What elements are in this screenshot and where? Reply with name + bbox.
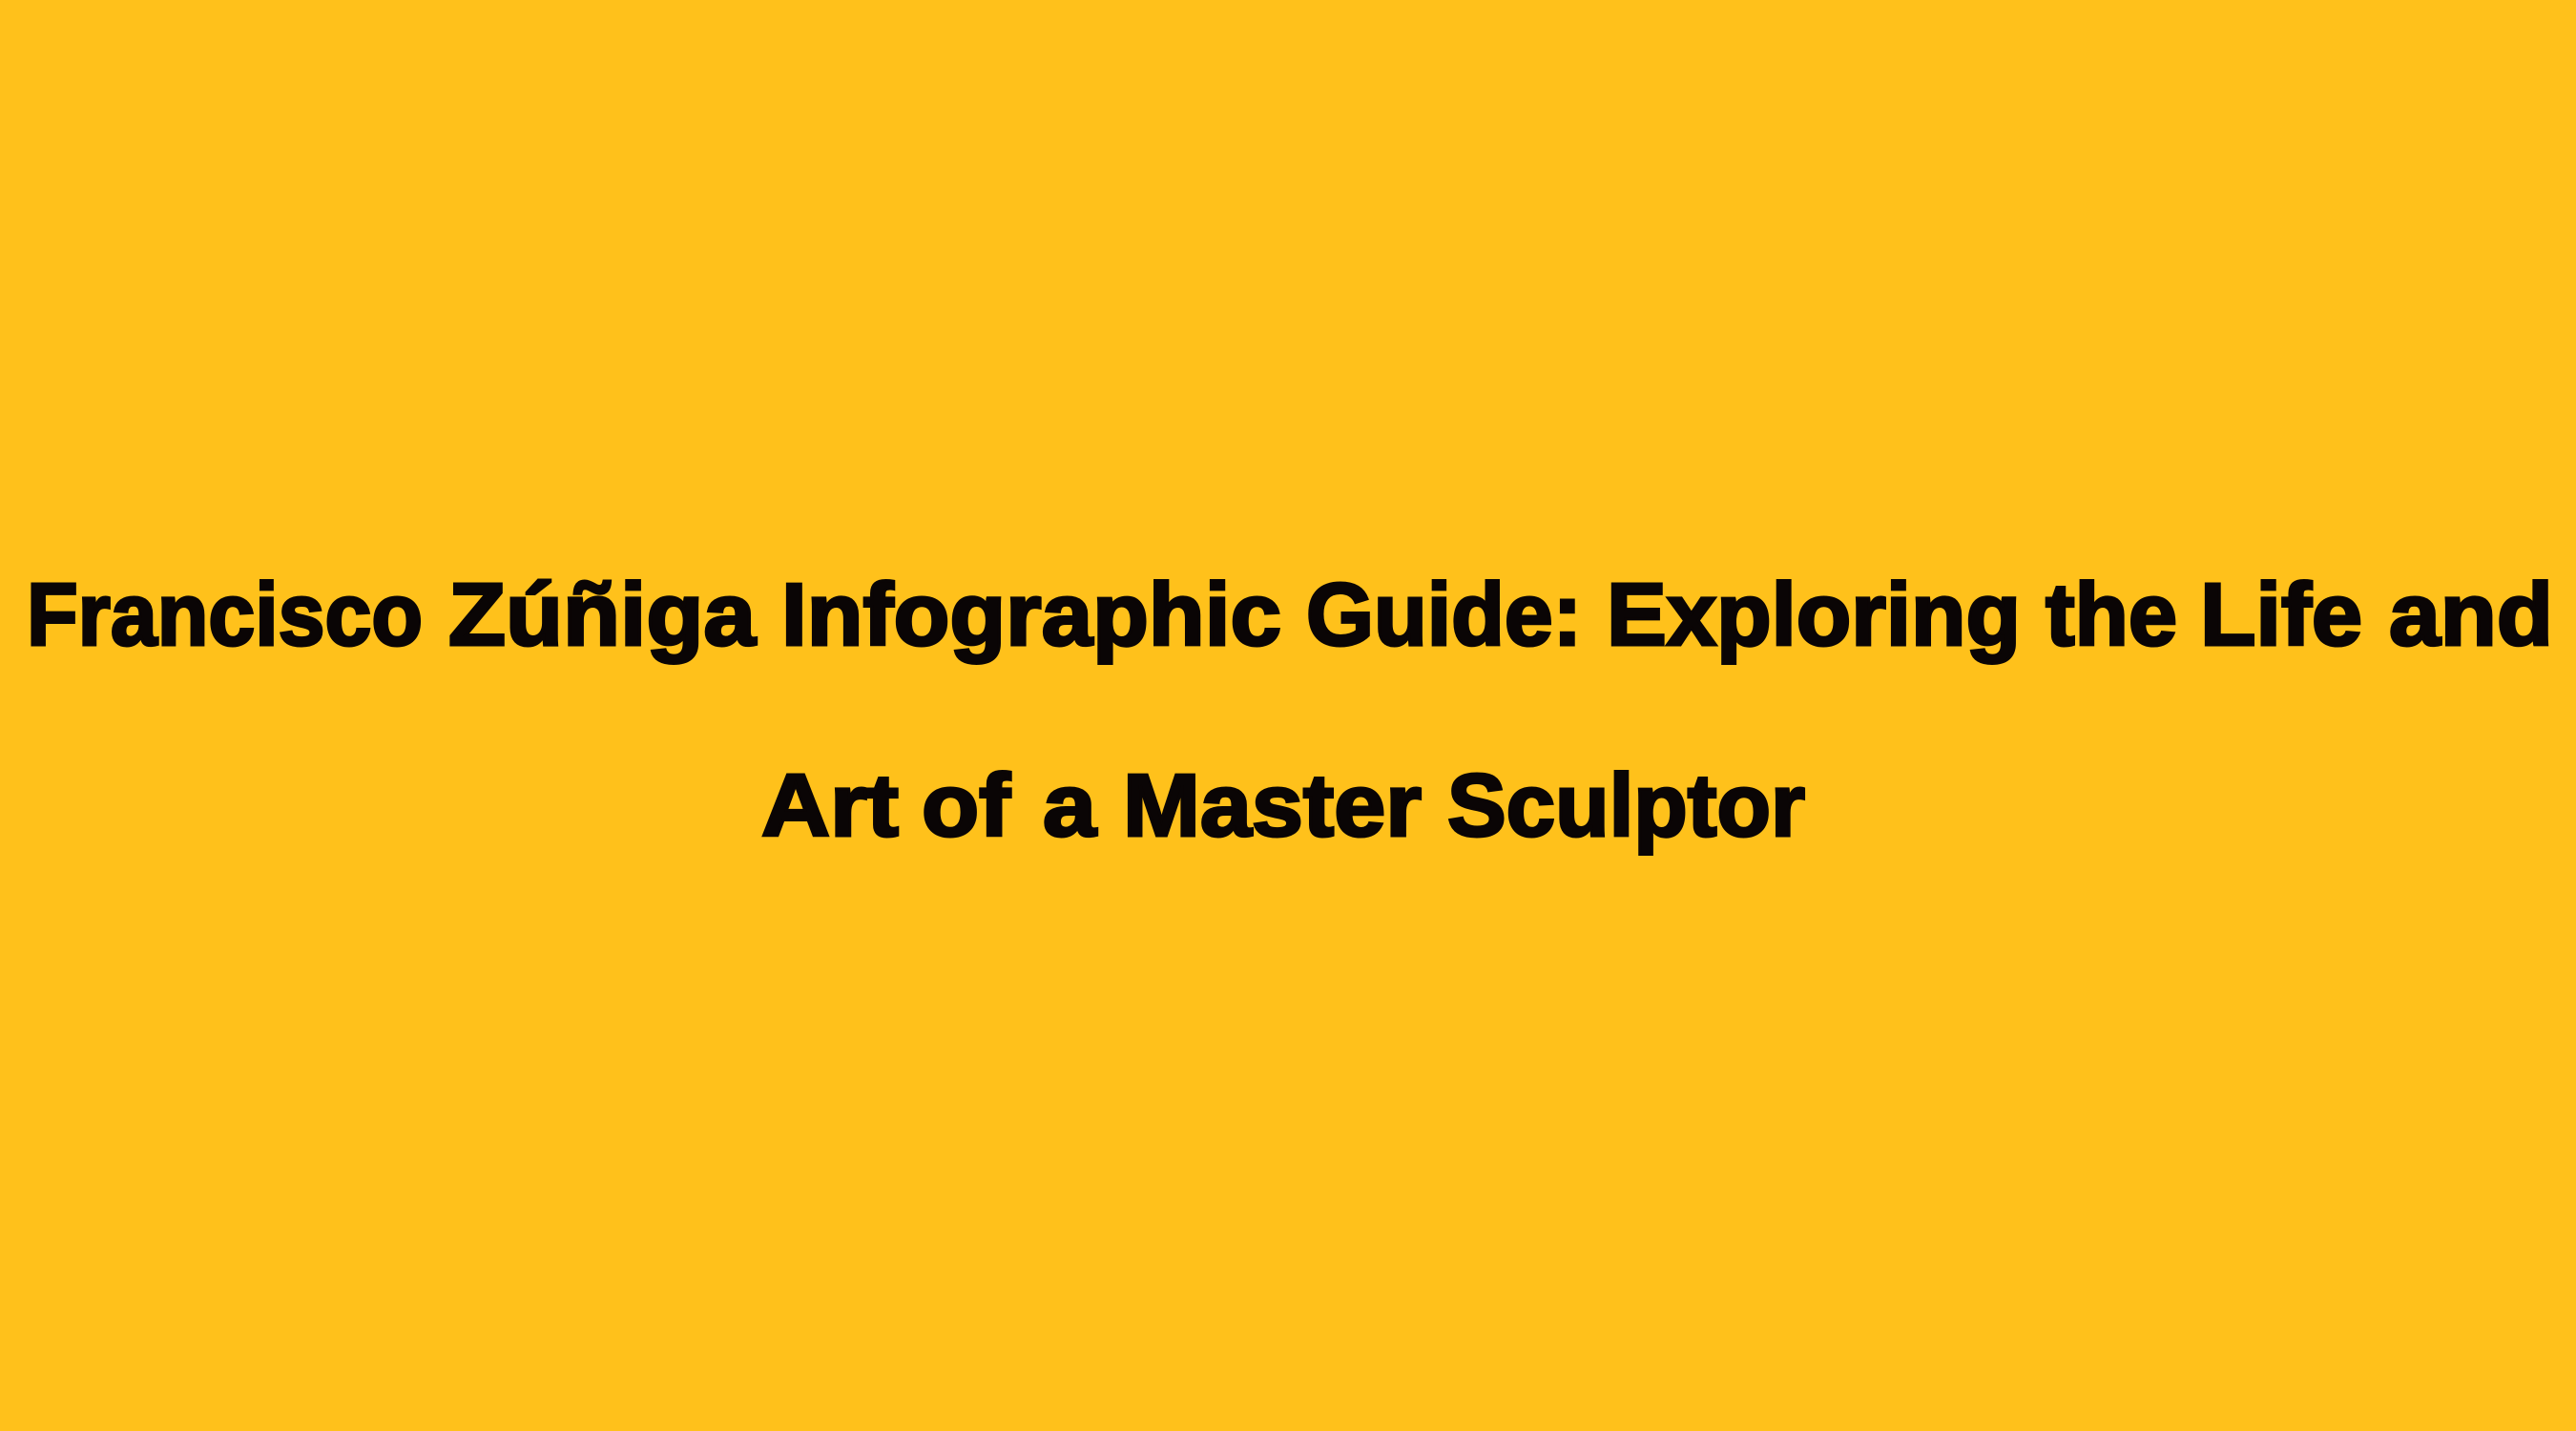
- title: the: [2046, 565, 2177, 664]
- title: Zúñiga: [448, 565, 757, 664]
- title: Francisco: [27, 565, 423, 664]
- title: Exploring: [1607, 565, 2021, 664]
- title: Art: [761, 756, 899, 855]
- title: Infographic: [781, 565, 1281, 664]
- title: Guide:: [1306, 565, 1582, 664]
- title: Master: [1123, 756, 1422, 855]
- title: a: [1043, 756, 1097, 855]
- title: [27, 565, 2553, 855]
- title: of: [922, 756, 1011, 855]
- title: Sculptor: [1447, 756, 1805, 855]
- title: Life: [2200, 565, 2362, 664]
- title: and: [2389, 565, 2553, 664]
